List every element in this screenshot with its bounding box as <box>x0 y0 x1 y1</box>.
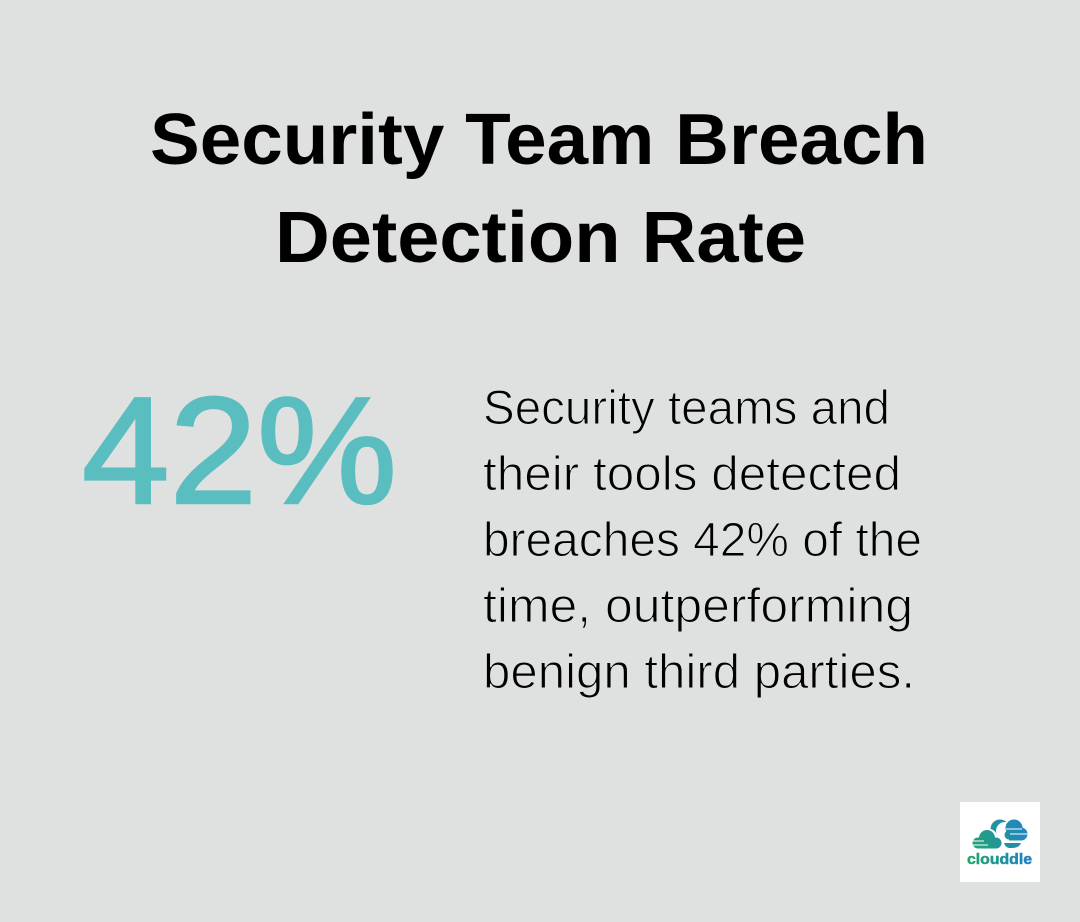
description text <box>483 382 922 699</box>
icon: clouds <box>972 820 1029 850</box>
title: Detection Rate <box>275 198 806 278</box>
title <box>150 100 928 278</box>
description text: benign third parties. <box>483 646 915 699</box>
logo: clouddle <box>960 802 1040 882</box>
big statistic: 42%: 42% <box>82 366 397 536</box>
description text: breaches 42% of the <box>483 514 922 567</box>
description text: their tools detected <box>483 448 901 501</box>
description text: Security teams and <box>483 382 890 435</box>
logo wordmark: clouddle <box>967 851 1032 868</box>
description text: time, outperforming <box>483 580 913 633</box>
title: Security Team Breach <box>150 100 928 180</box>
